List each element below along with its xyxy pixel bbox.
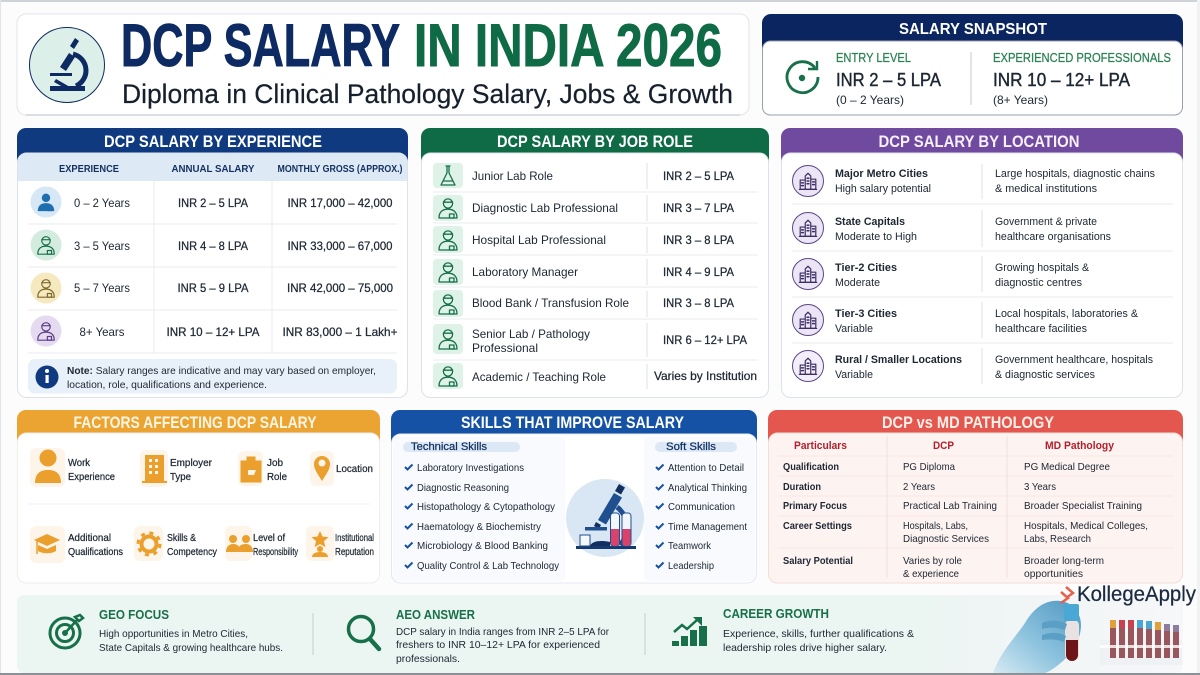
career growth <box>672 606 914 654</box>
row: tier-3 cities: Variable <box>835 323 873 335</box>
row: career settings: Diagnostic Services <box>903 533 989 545</box>
table header: MONTHLY GROSS (APPROX.) <box>278 163 402 175</box>
row: diagnostic lab professional <box>433 195 734 221</box>
panel: DCP vs MD Pathology <box>768 410 1183 583</box>
aeo answer: AEO ANSWER <box>396 607 476 622</box>
technical skills list <box>403 441 560 572</box>
main title: DCP SALARY <box>121 12 400 79</box>
row: 0-2 years <box>30 186 393 218</box>
row: major metro cities: High salary potential <box>835 183 931 195</box>
row: 3-5 years: INR 33,000 – 67,000 <box>288 239 393 253</box>
entry level <box>836 51 941 107</box>
row: qualification <box>783 461 1110 473</box>
table column headers: MD Pathology <box>1045 440 1115 452</box>
technical skills list: Histopathology & Cytopathology <box>417 501 556 513</box>
row: tier-2 cities <box>792 258 1090 290</box>
geo focus <box>50 607 283 654</box>
factor: skills and competency: Competency <box>167 546 218 558</box>
career growth: CAREER GROWTH <box>723 606 829 621</box>
row: major metro cities: & medical institutions <box>995 183 1097 195</box>
aeo answer <box>348 607 609 665</box>
photo: gloved hand holding sample tube and test tube rack <box>993 601 1182 673</box>
row: senior lab pathology professional: Professional <box>472 341 538 355</box>
row: primary focus <box>783 500 1142 512</box>
icon: growth chart <box>672 617 707 646</box>
row: salary potential: & experience <box>903 568 959 580</box>
table header: EXPERIENCE <box>59 163 119 175</box>
panel: salary snapshot <box>762 14 1183 115</box>
row: blood bank transfusion role: INR 3 – 8 LPA <box>663 296 734 310</box>
career growth: Experience, skills, further qualifications & <box>723 628 914 640</box>
geo focus: High opportunities in Metro Cities, <box>99 628 248 640</box>
row: senior lab pathology professional: INR 6 – 12+ LPA <box>663 333 747 347</box>
factor: additional qualifications: Additional <box>68 532 111 544</box>
row: 3-5 years: 3 – 5 Years <box>74 239 130 253</box>
factor: institutional reputation: Reputation <box>335 546 374 558</box>
row: duration: 2 Years <box>903 481 935 493</box>
row: tier-3 cities <box>792 304 1139 336</box>
KollegeApply logo: KollegeApply <box>1077 583 1196 606</box>
table column headers: DCP <box>933 440 954 452</box>
row: state capitals: healthcare organisations <box>995 231 1111 243</box>
row: salary potential: Varies by role <box>903 555 962 567</box>
heading: FACTORS AFFECTING DCP SALARY <box>74 413 317 432</box>
row: tier-3 cities: Local hospitals, laboratories & <box>995 308 1139 320</box>
row: primary focus: Primary Focus <box>783 500 847 512</box>
factor: work experience: Experience <box>68 471 115 483</box>
soft skills list: Attention to Detail <box>668 462 744 474</box>
icon: magnifying glass <box>348 616 379 649</box>
panel: skills that improve salary <box>391 410 757 583</box>
experienced professionals: INR 10 – 12+ LPA <box>993 70 1130 90</box>
factor: additional qualifications: Qualifications <box>68 546 123 558</box>
geo focus: GEO FOCUS <box>99 607 169 622</box>
row: state capitals: Moderate to High <box>835 231 917 243</box>
row: tier-2 cities: diagnostic centres <box>995 277 1082 289</box>
factor: employer type: Type <box>170 471 191 483</box>
row: 0-2 years: 0 – 2 Years <box>74 196 130 210</box>
row: primary focus: Practical Lab Training <box>903 500 997 512</box>
soft skills list: Communication <box>668 501 735 513</box>
row: 0-2 years: INR 2 – 5 LPA <box>178 196 248 210</box>
panel: salary by location <box>781 128 1183 398</box>
aeo answer: DCP salary in India ranges from INR 2–5 LPA for <box>396 626 609 638</box>
row: rural and smaller locations: Variable <box>835 369 873 381</box>
entry level: (0 – 2 Years) <box>836 93 904 107</box>
row: laboratory manager <box>433 259 734 285</box>
row: state capitals: Government & private <box>995 216 1097 228</box>
icon: microscope with test tubes <box>566 479 644 557</box>
heading: DCP vs MD PATHOLOGY <box>882 413 1055 432</box>
row: junior lab role: Junior Lab Role <box>472 169 553 183</box>
entry level: INR 2 – 5 LPA <box>836 70 941 90</box>
factor: employer type: Employer <box>170 457 212 469</box>
row: tier-3 cities: Tier-3 Cities <box>835 308 897 320</box>
soft skills list: Soft Skills <box>666 441 717 453</box>
experienced professionals <box>993 51 1171 107</box>
heading: DCP SALARY BY EXPERIENCE <box>104 132 322 151</box>
row: 5-7 years: INR 42,000 – 75,000 <box>287 281 393 295</box>
factor: job role: Job <box>267 457 283 469</box>
note callout: location, role, qualifications and experience. <box>67 379 267 391</box>
row: salary potential: opportunities <box>1024 568 1083 580</box>
row: rural and smaller locations: & diagnostic services <box>995 369 1095 381</box>
row: hospital lab professional: Hospital Lab Professional <box>472 233 606 247</box>
table column headers: Particulars <box>794 440 847 452</box>
experienced professionals: EXPERIENCED PROFESSIONALS <box>993 51 1171 65</box>
row: career settings: Career Settings <box>783 520 852 532</box>
row: tier-2 cities: Moderate <box>835 277 880 289</box>
row: 8+ years: INR 10 – 12+ LPA <box>166 325 260 339</box>
row: hospital lab professional <box>433 226 734 253</box>
row: duration: 3 Years <box>1024 481 1056 493</box>
row: career settings: Hospitals, Labs, <box>903 520 968 532</box>
soft skills list: Time Management <box>668 521 747 533</box>
row: laboratory manager: INR 4 – 9 LPA <box>663 265 734 279</box>
icon: microscope emblem <box>30 28 104 102</box>
row: tier-2 cities: Tier-2 Cities <box>835 262 897 274</box>
row: major metro cities: Large hospitals, diagnostic chains <box>995 168 1155 180</box>
factor: job role <box>238 451 287 486</box>
row: duration: Duration <box>783 481 821 493</box>
factor: level of responsibility <box>225 526 299 561</box>
table header: ANNUAL SALARY <box>172 163 254 175</box>
technical skills list: Microbiology & Blood Banking <box>417 540 548 552</box>
factor: institutional reputation: Institutional <box>335 532 374 544</box>
aeo answer: professionals. <box>396 653 460 665</box>
row: 5-7 years <box>30 272 393 304</box>
row: academic teaching role <box>433 363 757 389</box>
row: laboratory manager: Laboratory Manager <box>472 265 578 279</box>
row: 3-5 years: INR 4 – 8 LPA <box>178 239 248 253</box>
row: diagnostic lab professional: INR 3 – 7 LPA <box>663 201 734 215</box>
row: tier-2 cities: Growing hospitals & <box>995 262 1090 274</box>
heading: DCP SALARY BY JOB ROLE <box>497 132 693 151</box>
panel: salary by job role <box>421 128 769 398</box>
soft skills list <box>655 441 747 572</box>
icon: clock arrow <box>787 61 818 93</box>
row: tier-3 cities: healthcare facilities <box>995 323 1087 335</box>
row: rural and smaller locations <box>792 350 1153 382</box>
row: qualification: PG Diploma <box>903 461 955 473</box>
row: primary focus: Broader Specialist Training <box>1024 500 1142 512</box>
career growth: leadership roles drive higher salary. <box>723 642 887 654</box>
row: senior lab pathology professional <box>433 324 747 355</box>
row: academic teaching role: Academic / Teaching Role <box>472 370 606 384</box>
row: senior lab pathology professional: Senior Lab / Pathology <box>472 327 590 341</box>
technical skills list: Technical Skills <box>411 441 487 453</box>
row: qualification: Qualification <box>783 461 839 473</box>
soft skills list: Analytical Thinking <box>668 482 747 494</box>
row: hospital lab professional: INR 3 – 8 LPA <box>663 233 734 247</box>
soft skills list: Leadership <box>668 560 714 572</box>
factor: level of responsibility: Level of <box>253 532 285 544</box>
technical skills list: Diagnostic Reasoning <box>417 482 509 494</box>
icon: target <box>50 615 83 648</box>
row: qualification: PG Medical Degree <box>1024 461 1110 473</box>
heading: SALARY SNAPSHOT <box>899 21 1047 38</box>
row: blood bank transfusion role <box>433 290 734 317</box>
factor: additional qualifications <box>30 526 123 563</box>
row: blood bank transfusion role: Blood Bank / Transfusion Role <box>472 296 629 310</box>
subtitle: Diploma in Clinical Pathology Salary, Jobs & Growth <box>122 79 733 109</box>
geo focus: State Capitals & growing healthcare hubs. <box>99 642 283 654</box>
title panel <box>17 12 749 115</box>
factor: location: Location <box>336 463 373 475</box>
bottom band <box>17 595 1183 673</box>
row: 8+ years: 8+ Years <box>80 325 124 339</box>
row: salary potential <box>783 555 1104 580</box>
heading: DCP SALARY BY LOCATION <box>878 132 1080 151</box>
row: junior lab role <box>433 163 734 188</box>
technical skills list: Quality Control & Lab Technology <box>417 560 560 572</box>
row: 3-5 years <box>30 230 393 260</box>
row: major metro cities <box>792 166 1155 196</box>
entry level: ENTRY LEVEL <box>836 51 911 65</box>
soft skills list: Teamwork <box>668 540 712 552</box>
row: 8+ years <box>30 316 398 346</box>
row: state capitals <box>792 212 1111 244</box>
row: rural and smaller locations: Government healthcare, hospitals <box>995 354 1153 366</box>
factor: work experience <box>30 448 115 487</box>
row: junior lab role: INR 2 – 5 LPA <box>663 169 734 183</box>
row: rural and smaller locations: Rural / Smaller Locations <box>835 354 962 366</box>
row: 5-7 years: 5 – 7 Years <box>74 281 130 295</box>
factor: institutional reputation <box>306 526 374 561</box>
technical skills list: Haematology & Biochemistry <box>417 521 542 533</box>
note callout <box>28 359 397 394</box>
row: duration <box>783 481 1056 493</box>
row: 0-2 years: INR 17,000 – 42,000 <box>288 196 393 210</box>
factor: skills and competency <box>134 526 218 561</box>
panel: factors affecting salary <box>17 410 380 583</box>
factor: job role: Role <box>267 471 287 483</box>
row: 8+ years: INR 83,000 – 1 Lakh+ <box>282 325 398 339</box>
table header <box>18 153 407 181</box>
row: state capitals: State Capitals <box>835 216 905 228</box>
row: major metro cities: Major Metro Cities <box>835 168 928 180</box>
row: career settings: Hospitals, Medical Colleges, <box>1024 520 1148 532</box>
row: diagnostic lab professional: Diagnostic Lab Professional <box>472 201 618 215</box>
technical skills list: Laboratory Investigations <box>417 462 524 474</box>
row: academic teaching role: Varies by Institution <box>654 369 757 383</box>
aeo answer: freshers to INR 10–12+ LPA for experienced <box>396 639 600 651</box>
row: career settings <box>783 520 1148 545</box>
heading: SKILLS THAT IMPROVE SALARY <box>461 413 685 432</box>
panel: salary by experience <box>17 128 408 398</box>
factor: employer type <box>140 450 212 487</box>
table column headers <box>794 440 1115 452</box>
factor: work experience: Work <box>68 457 91 469</box>
factor: skills and competency: Skills & <box>167 532 196 544</box>
row: salary potential: Salary Potential <box>783 555 853 567</box>
factor: location <box>310 451 373 486</box>
experienced professionals: (8+ Years) <box>993 93 1048 107</box>
row: 5-7 years: INR 5 – 9 LPA <box>178 281 248 295</box>
note callout: Note: Salary ranges are indicative and may vary based on employer, <box>67 365 376 377</box>
main title highlight: IN INDIA 2026 <box>414 12 722 79</box>
row: salary potential: Broader long-term <box>1024 555 1104 567</box>
row: career settings: Labs, Research <box>1024 533 1091 545</box>
factor: level of responsibility: Responsibility <box>253 546 299 558</box>
